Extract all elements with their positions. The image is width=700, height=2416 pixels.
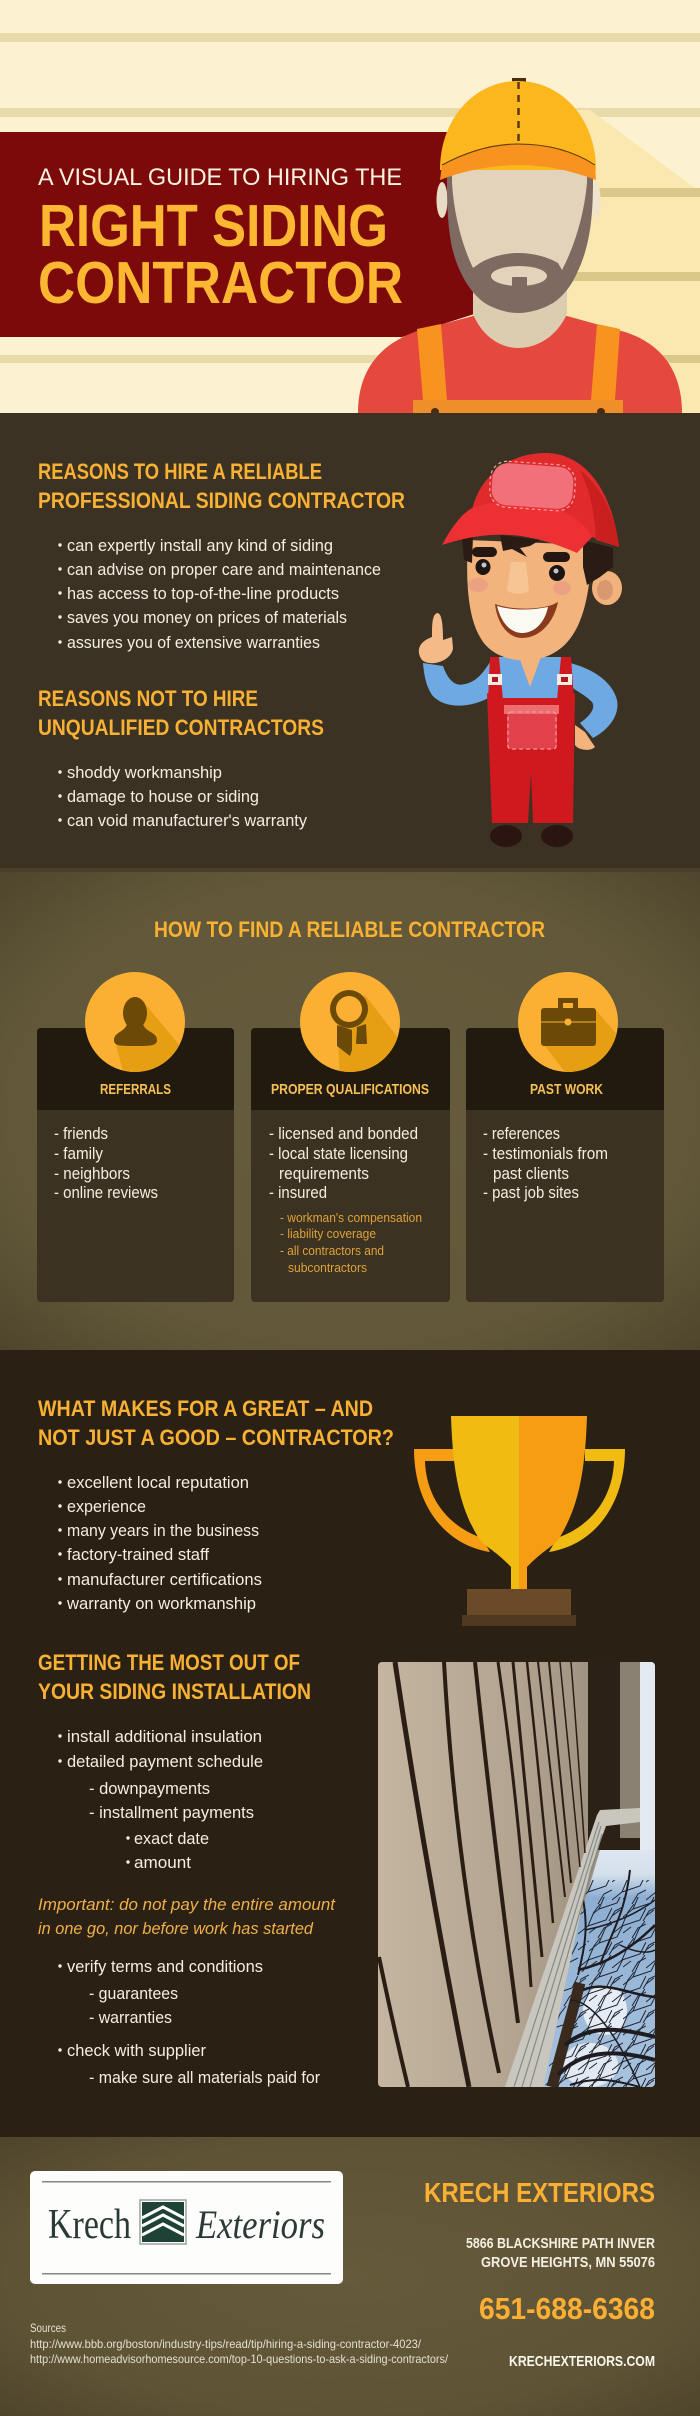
list: proper qualifications: - local state licensing — [269, 1144, 408, 1163]
icon: trophy — [414, 1416, 625, 1626]
title text: A VISUAL GUIDE TO HIRING THE — [38, 164, 402, 191]
list: terms and supplier checks: - guarantees — [89, 1984, 178, 2003]
callout: important payment note — [38, 1895, 336, 1938]
title text: RIGHT SIDING — [39, 193, 388, 259]
panel: how to find a reliable contractor — [0, 872, 700, 1350]
list: reasons to hire — [58, 536, 381, 652]
contact details: GROVE HEIGHTS, MN 55076 — [481, 2254, 655, 2271]
sub-list: insurance types: - all contractors and — [280, 1243, 384, 1258]
heading: reasons not to hire — [38, 686, 324, 740]
contact details: KRECHEXTERIORS.COM — [509, 2353, 655, 2370]
sources — [30, 2321, 449, 2366]
list: installation tips: exact date — [134, 1829, 209, 1848]
logo: Krech Exteriors — [30, 2171, 343, 2284]
contact details — [424, 2177, 655, 2370]
illustration: bearded worker with hard hat — [358, 78, 682, 416]
list: installation tips: detailed payment schedule — [67, 1752, 263, 1771]
list: installation tips: amount — [134, 1853, 191, 1872]
heading: what makes a great contractor: NOT JUST A GOOD – CONTRACTOR? — [38, 1425, 394, 1450]
list: reasons to hire: has access to top-of-the-line products — [67, 584, 339, 603]
list: proper qualifications — [269, 1124, 418, 1202]
heading: reasons to hire: REASONS TO HIRE A RELIABLE — [38, 459, 322, 484]
list: reasons not to hire: shoddy workmanship — [67, 763, 222, 782]
heading: reasons to hire — [38, 459, 405, 513]
sub-list: insurance types: - liability coverage — [280, 1226, 376, 1241]
contact details: 651-688-6368 — [479, 2291, 655, 2326]
list: referrals: - friends — [54, 1124, 108, 1143]
heading: getting the most out of your siding — [38, 1650, 311, 1704]
card: past work — [466, 972, 664, 1302]
sub-list: insurance types: - workman's compensation — [280, 1210, 422, 1225]
list: proper qualifications: - insured — [269, 1183, 327, 1202]
panel: footer — [0, 2137, 700, 2416]
logo: Krech Exteriors: Exteriors — [195, 2202, 325, 2247]
list: reasons to hire: can advise on proper care and maintenance — [67, 560, 381, 579]
heading: getting the most out of your siding: YOUR SIDING INSTALLATION — [38, 1679, 311, 1704]
list: referrals: - neighbors — [54, 1164, 130, 1183]
list: terms and supplier checks: verify terms and conditions — [67, 1957, 263, 1976]
list: past work: past clients — [493, 1164, 569, 1183]
illustration: smiling contractor in red cap — [419, 453, 622, 847]
list: installation tips: install additional insulation — [67, 1727, 262, 1746]
sub-list: insurance types: subcontractors — [288, 1260, 367, 1275]
title text: CONTRACTOR — [38, 250, 403, 316]
icon: hard hat — [440, 78, 596, 180]
heading: how to find: HOW TO FIND A RELIABLE CONTRACTOR — [154, 917, 545, 942]
list: terms and supplier checks — [58, 1957, 320, 2087]
list: great contractor traits: warranty on workmanship — [66, 1594, 256, 1613]
list: great contractor traits: experience — [67, 1497, 146, 1516]
list: installation tips: - installment payments — [89, 1803, 254, 1822]
list: great contractor traits: excellent local reputation — [67, 1473, 249, 1492]
icon: award rosette — [300, 972, 400, 1072]
list: great contractor traits: manufacturer certifications — [67, 1570, 262, 1589]
card: proper qualifications — [251, 972, 450, 1302]
callout: important payment note: Important: do not pay the entire amount — [38, 1895, 336, 1914]
heading: reasons not to hire: UNQUALIFIED CONTRACTORS — [38, 715, 324, 740]
list: referrals: - family — [54, 1144, 103, 1163]
sources: http://www.bbb.org/boston/industry-tips/read/tip/hiring-a-siding-contractor-4023/ — [30, 2337, 422, 2351]
contact details: KRECH EXTERIORS — [424, 2177, 655, 2208]
list: reasons not to hire: can void manufacturer's warranty — [67, 811, 307, 830]
list: past work: - past job sites — [483, 1183, 579, 1202]
panel: reasons to hire — [0, 413, 700, 872]
icon: briefcase — [518, 972, 618, 1072]
list: proper qualifications: requirements — [279, 1164, 369, 1183]
sources: Sources — [30, 2321, 66, 2335]
logo: Krech Exteriors: Krech — [48, 2202, 131, 2248]
icon: person — [85, 972, 185, 1072]
list: past work: - testimonials from — [483, 1144, 608, 1163]
hand with raised finger — [419, 613, 453, 663]
panel: great contractor and getting the most — [38, 1400, 655, 2087]
list: referrals: - online reviews — [54, 1183, 158, 1202]
photo: house siding seen from below — [378, 1662, 666, 2104]
list: terms and supplier checks: - warranties — [89, 2008, 172, 2027]
list: great contractor traits — [58, 1473, 262, 1613]
list: reasons to hire: can expertly install any kind of siding — [67, 536, 333, 555]
heading: what makes a great contractor: WHAT MAKES FOR A GREAT – AND — [38, 1396, 373, 1421]
heading: what makes a great contractor — [38, 1396, 394, 1450]
heading: reasons not to hire: REASONS NOT TO HIRE — [38, 686, 258, 711]
card: past work: PAST WORK — [530, 1081, 603, 1098]
list: installation tips: - downpayments — [89, 1779, 210, 1798]
character head — [462, 535, 622, 660]
list: referrals — [54, 1124, 158, 1202]
list: reasons not to hire — [58, 763, 307, 830]
card: referrals: REFERRALS — [100, 1081, 171, 1098]
list: great contractor traits: factory-trained staff — [67, 1545, 209, 1564]
list: great contractor traits: many years in the business — [67, 1521, 259, 1540]
card: referrals — [37, 972, 234, 1302]
title text — [38, 164, 403, 316]
list: proper qualifications: - licensed and bonded — [269, 1124, 418, 1143]
list: reasons not to hire: damage to house or siding — [67, 787, 259, 806]
list: reasons to hire: assures you of extensive warranties — [67, 633, 320, 652]
callout: important payment note: in one go, nor before work has started — [38, 1919, 314, 1938]
red cap — [442, 453, 619, 553]
heading: getting the most out of your siding: GETTING THE MOST OUT OF — [38, 1650, 300, 1675]
contact details: 5866 BLACKSHIRE PATH INVER — [466, 2235, 655, 2252]
list: installation tips — [58, 1727, 263, 1872]
list: past work: - references — [483, 1124, 560, 1143]
list: terms and supplier checks: check with supplier — [67, 2041, 206, 2060]
sub-list: insurance types — [280, 1210, 422, 1275]
sources: http://www.homeadvisorhomesource.com/top-10-questions-to-ask-a-siding-contractors/ — [30, 2352, 449, 2366]
list: terms and supplier checks: - make sure all materials paid for — [89, 2068, 320, 2087]
card: proper qualifications: PROPER QUALIFICATIONS — [271, 1081, 429, 1098]
panel: header with siding background — [0, 0, 700, 416]
title banner — [0, 132, 487, 337]
list: reasons to hire: saves you money on prices of materials — [67, 608, 347, 627]
heading: reasons to hire: PROFESSIONAL SIDING CONTRACTOR — [38, 488, 405, 513]
list: past work — [483, 1124, 608, 1202]
